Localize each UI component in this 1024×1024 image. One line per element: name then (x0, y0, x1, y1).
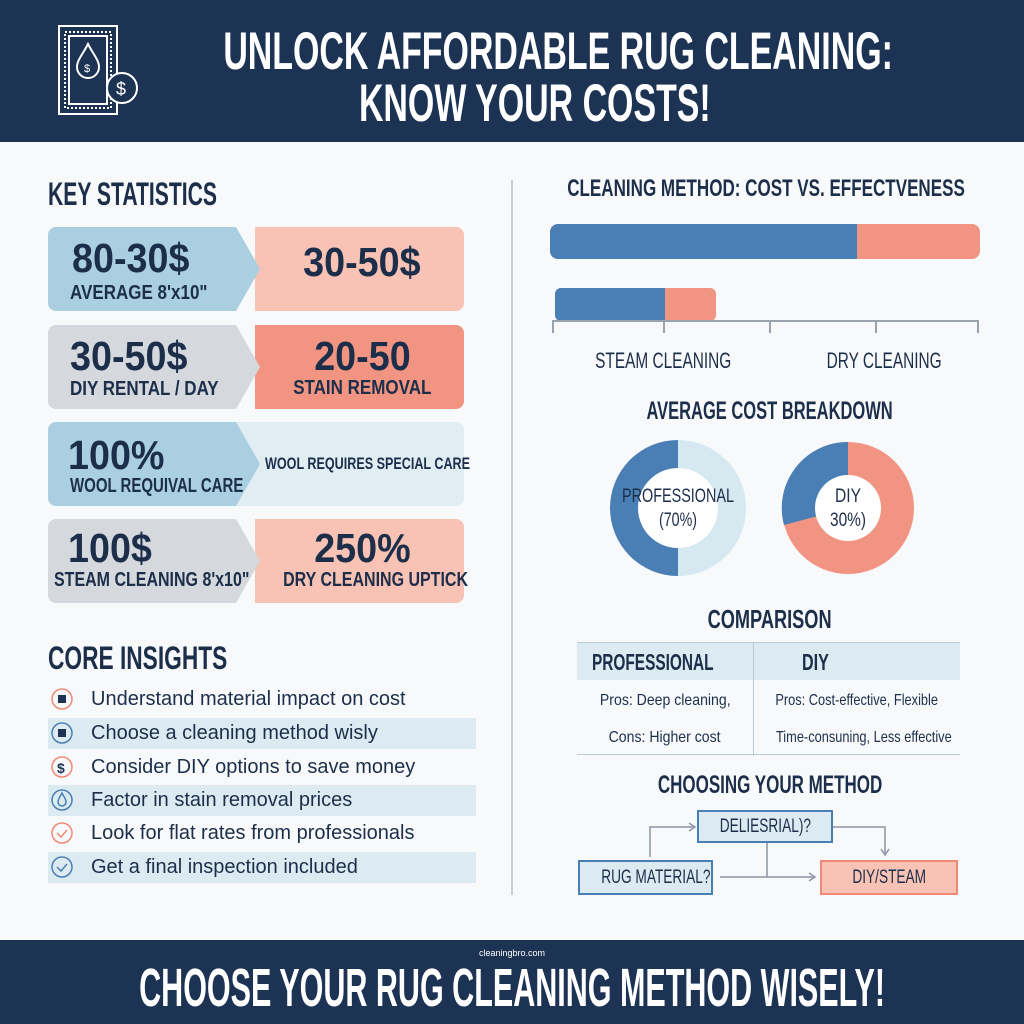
donut charts (610, 440, 914, 576)
comparison table: Time-consuning, Less effective (776, 729, 952, 746)
stat row 4: STEAM CLEANING 8'x10" (54, 569, 249, 591)
list: insights: Look for flat rates from professionals (91, 822, 414, 844)
donut charts: 30%) (830, 510, 866, 531)
title: UNLOCK AFFORDABLE RUG CLEANING: (223, 22, 893, 81)
list: insights: Consider DIY options to save money (91, 756, 415, 778)
stat row 1 (48, 227, 464, 311)
list: insights: Understand material impact on cost (91, 688, 406, 710)
flowchart: RUG MATERIAL? (601, 867, 710, 888)
title (223, 22, 893, 133)
stat row 3 (48, 422, 470, 506)
heading: key statistics: KEY STATISTICS (48, 176, 217, 212)
comparison table: Pros: Cost-effective, Flexible (776, 692, 938, 709)
stat row 3: 100% (68, 432, 164, 478)
stat row 4: DRY CLEANING UPTICK (283, 569, 468, 591)
comparison table: PROFESSIONAL (592, 649, 714, 675)
footer (0, 940, 1024, 1024)
list: insights: Get a final inspection included (91, 856, 358, 878)
heading: cleaning method: CLEANING METHOD: COST VS. EFFECTVENESS (567, 175, 965, 202)
flowchart: DELIESRIAL)? (719, 816, 811, 837)
divider (511, 180, 513, 895)
title: KNOW YOUR COSTS! (359, 74, 711, 133)
bar chart (550, 224, 980, 373)
list: insights: Choose a cleaning method wisly (91, 722, 378, 744)
icon: rug with dollar (58, 25, 138, 115)
stat row 2: 20-50 (314, 333, 410, 379)
donut charts: PROFESSIONAL (622, 486, 734, 507)
stat row 2 (48, 325, 464, 409)
header (0, 0, 1024, 142)
list: insights: Factor in stain removal prices (91, 789, 352, 811)
footer url: cleaningbro.com (479, 948, 545, 958)
heading: comparison: COMPARISON (708, 604, 832, 634)
icon: rug with dollar: $ (84, 63, 90, 75)
heading: choosing: CHOOSING YOUR METHOD (658, 771, 882, 799)
stat row 2: STAIN REMOVAL (293, 377, 431, 399)
comparison table: Cons: Higher cost (609, 729, 721, 746)
stat row 4 (48, 519, 468, 603)
comparison table: Pros: Deep cleaning, (600, 692, 730, 709)
panel: stats (48, 227, 470, 603)
stat row 3: WOOL REQUIRES SPECIAL CARE (265, 454, 470, 473)
stat row 3: WOOL REQUIVAL CARE (70, 475, 243, 497)
comparison table (577, 642, 960, 756)
list: insights: $ (57, 760, 65, 776)
stat row 4: 100$ (68, 525, 152, 571)
stat row 2: DIY RENTAL / DAY (70, 378, 219, 400)
heading: core insights: CORE INSIGHTS (48, 640, 227, 676)
footer slogan: CHOOSE YOUR RUG CLEANING METHOD WISELY! (139, 958, 885, 1018)
flowchart: DIY/STEAM (852, 867, 926, 888)
heading: cost breakdown: AVERAGE COST BREAKDOWN (647, 397, 893, 425)
stat row 1: AVERAGE 8'x10" (70, 282, 207, 304)
list: insights (48, 688, 476, 883)
bar chart: STEAM CLEANING (595, 348, 731, 373)
stat row 4: 250% (314, 525, 410, 571)
stat row 1: 80-30$ (72, 235, 189, 281)
stat row 1: 30-50$ (303, 239, 421, 285)
donut charts: (70%) (659, 510, 697, 531)
stat row 2: 30-50$ (70, 333, 187, 379)
bar chart: DRY CLEANING (827, 348, 941, 373)
flowchart (578, 810, 958, 895)
donut charts: DIY (835, 486, 861, 507)
comparison table: DIY (802, 649, 829, 675)
icon: rug with dollar: $ (116, 79, 126, 99)
